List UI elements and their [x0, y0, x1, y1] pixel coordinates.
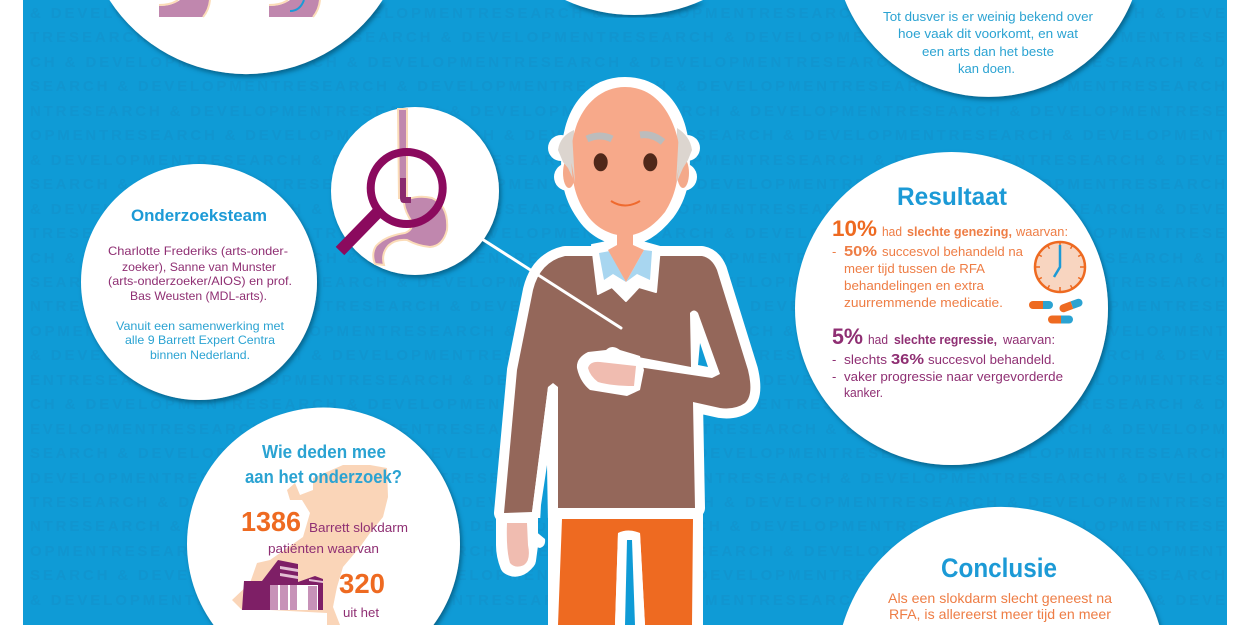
intro text: hoe vaak dit voorkomt, en wat [898, 26, 1078, 41]
pointer line from magnifier to chest [482, 239, 621, 328]
background text pattern: TRESEARCH & DEVELOPMENTRESEARCH & DEVELOPMENTRESEARCH & DEVELOPMENTRESEARCH & DEVELOPMENTRESE [30, 225, 1225, 242]
background text pattern: OPMENTRESEARCH & DEVELOPMENTRESEARCH & DEVELOPMENTRESEARCH & DEVELOPMENTRESEARCH & DEVELOPMENT [30, 127, 1225, 144]
background text pattern: NTRESEARCH & DEVELOPMENTRESEARCH & DEVELOPMENTRESEARCH & DEVELOPMENTRESEARCH & DEVELOPMENTRESE [30, 103, 1225, 120]
team members text: (arts-onderzoeker/AIOS) en prof. [108, 274, 292, 288]
hand on chest [577, 347, 644, 396]
stat: 1386 patients [241, 506, 408, 556]
background text pattern: OPMENTRESEARCH & DEVELOPMENTRESEARCH & DEVELOPMENTRESEARCH & DEVELOPMENTRESEARCH & DEVELOPMENT [30, 543, 1225, 560]
icon: oesophagus and stomach [373, 109, 447, 265]
intro text [883, 9, 1094, 76]
result: 10 percent poor healing: - [832, 244, 836, 259]
map of the Netherlands [232, 465, 388, 625]
conclusion text: Als een slokdarm slecht geneest na [888, 590, 1112, 606]
background text pattern: ENTRESEARCH & DEVELOPMENTRESEARCH & DEVELOPMENTRESEARCH & DEVELOPMENTRESEARCH & DEVELOPMENTRES [30, 372, 1225, 389]
heading: onderzoeksteam: Onderzoeksteam [131, 206, 267, 225]
result: 5 percent poor regression: succesvol behandeld. [928, 352, 1055, 367]
background text pattern: & DEVELOPMENTRESEARCH & DEVELOPMENTRESEARCH & DEVELOPMENTRESEARCH & DEVELOPMENTRESEARCH & DEVE [30, 5, 1225, 22]
result: 10 percent poor healing [832, 216, 1068, 310]
team members text: zoeker), Sanne van Munster [122, 260, 276, 274]
team members text: Bas Weusten (MDL-arts). [130, 289, 267, 303]
background text pattern: & DEVELOPMENTRESEARCH & DEVELOPMENTRESEARCH & DEVELOPMENTRESEARCH & DEVELOPMENTRESEARCH & DEVE [30, 592, 1225, 609]
arm gap between sleeve and torso [532, 383, 558, 512]
arm crease [638, 310, 720, 378]
result: 5 percent poor regression: waarvan: [1002, 332, 1055, 347]
background text pattern: CH & DEVELOPMENTRESEARCH & DEVELOPMENTRESEARCH & DEVELOPMENTRESEARCH & DEVELOPMENTRESEARCH & D [30, 250, 1225, 267]
result: 10 percent poor healing: 50% [844, 243, 877, 260]
panel: top-left stomach comparison [109, 0, 383, 74]
background text pattern: SEARCH & DEVELOPMENTRESEARCH & DEVELOPMENTRESEARCH & DEVELOPMENTRESEARCH & DEVELOPMENTRESEARCH [30, 567, 1225, 584]
ears [563, 158, 689, 188]
panel: top-centre circle [565, 0, 703, 15]
conclusion text: RFA, is allereerst meer tijd en meer [889, 606, 1111, 622]
panel: wie deden mee [187, 408, 460, 625]
stat: 1386 patients: Barrett slokdarm [309, 520, 408, 535]
icon: stomach right [269, 0, 320, 17]
result: 10 percent poor healing: 10% [832, 216, 877, 241]
background text pattern: EVELOPMENTRESEARCH & DEVELOPMENTRESEARCH & DEVELOPMENTRESEARCH & DEVELOPMENTRESEARCH & DEVELOPM [30, 421, 1225, 438]
icon: clock [1035, 242, 1085, 292]
heading: resultaat: Resultaat [897, 183, 1008, 211]
background text pattern: OPMENTRESEARCH & DEVELOPMENTRESEARCH & DEVELOPMENTRESEARCH & DEVELOPMENTRESEARCH & DEVELOPMENT [30, 323, 1225, 340]
collaboration text [116, 319, 285, 362]
intro text: kan doen. [958, 61, 1015, 76]
team members text: Charlotte Frederiks (arts-onder- [108, 244, 288, 258]
head [572, 87, 679, 236]
hair [558, 128, 692, 184]
hair over face [571, 130, 680, 184]
heading: wie deden mee: aan het onderzoek? [245, 467, 402, 487]
heading: wie deden mee [245, 442, 402, 487]
illustration: patient figure [504, 87, 750, 625]
result: 10 percent poor healing: meer tijd tussen de RFA [844, 261, 985, 276]
icon: pills [1029, 298, 1084, 324]
panel: onderzoeksteam [81, 164, 317, 400]
result: 5 percent poor regression [832, 324, 1063, 400]
result: 5 percent poor regression: vaker progressie naar vergevorderde [844, 369, 1063, 384]
panel: top-right introduction [845, 0, 1132, 97]
background text pattern: NTRESEARCH & DEVELOPMENTRESEARCH & DEVELOPMENTRESEARCH & DEVELOPMENTRESEARCH & DEVELOPMENTRESE [30, 518, 1225, 535]
eyebrows [587, 135, 663, 142]
stat: 320 patients: uit het [343, 605, 379, 620]
result: 10 percent poor healing: zuurremmende medicatie. [844, 295, 1003, 310]
stat: 1386 patients: 1386 [241, 506, 301, 537]
collaboration text: alle 9 Barrett Expert Centra [125, 333, 275, 347]
background text pattern: TRESEARCH & DEVELOPMENTRESEARCH & DEVELOPMENTRESEARCH & DEVELOPMENTRESEARCH & DEVELOPMENTRESE [30, 29, 1225, 46]
panel: conclusie [843, 507, 1159, 625]
collaboration text: Vanuit een samenwerking met [116, 319, 285, 333]
result: 5 percent poor regression: - [832, 352, 836, 367]
icon: stomach left [159, 0, 210, 17]
stat: 320 patients: 320 [339, 568, 385, 599]
heading: conclusie: Conclusie [941, 553, 1057, 583]
result: 10 percent poor healing: behandelingen en extra [844, 278, 985, 293]
background text pattern: DEVELOPMENTRESEARCH & DEVELOPMENTRESEARCH & DEVELOPMENTRESEARCH & DEVELOPMENTRESEARCH & DEVELOP [30, 470, 1225, 487]
icon: magnifying glass [340, 152, 443, 251]
background text pattern: SEARCH & DEVELOPMENTRESEARCH & DEVELOPMENTRESEARCH & DEVELOPMENTRESEARCH & DEVELOPMENTRESEARCH [30, 274, 1225, 291]
background text pattern: NTRESEARCH & DEVELOPMENTRESEARCH & DEVELOPMENTRESEARCH & DEVELOPMENTRESEARCH & DEVELOPMENTRESE [30, 298, 1225, 315]
background text pattern: SEARCH & DEVELOPMENTRESEARCH & DEVELOPMENTRESEARCH & DEVELOPMENTRESEARCH & DEVELOPMENTRESEARCH [30, 78, 1225, 95]
background text pattern: CH & DEVELOPMENTRESEARCH & DEVELOPMENTRESEARCH & DEVELOPMENTRESEARCH & DEVELOPMENTRESEARCH & D [30, 54, 1225, 71]
background text pattern: SEARCH & DEVELOPMENTRESEARCH & DEVELOPMENTRESEARCH & DEVELOPMENTRESEARCH & DEVELOPMENTRESEARCH [30, 445, 1225, 462]
result: 10 percent poor healing: had [882, 224, 902, 239]
stat: 320 patients [339, 568, 385, 620]
sweater [504, 256, 750, 513]
stat: 1386 patients: patiënten waarvan [268, 541, 379, 556]
team members text [108, 244, 292, 303]
collaboration text: binnen Nederland. [150, 348, 250, 362]
result: 5 percent poor regression: had [868, 332, 888, 347]
eyes [594, 153, 657, 171]
trousers [558, 519, 693, 625]
result: 10 percent poor healing: slechte genezing, [907, 224, 1012, 239]
panel: magnifier on stomach [331, 107, 499, 275]
background text pattern: & DEVELOPMENTRESEARCH & DEVELOPMENTRESEARCH & DEVELOPMENTRESEARCH & DEVELOPMENTRESEARCH & DEVE [30, 152, 1225, 169]
shirt collar [592, 230, 660, 301]
result: 5 percent poor regression: 5% [832, 324, 863, 349]
result: 5 percent poor regression: - [832, 369, 836, 384]
hanging hand [507, 523, 545, 567]
icon: hospital building [242, 560, 323, 610]
result: 5 percent poor regression: kanker. [844, 385, 883, 400]
blue gap beside sleeve [540, 465, 548, 523]
mouth [611, 201, 640, 206]
result: 5 percent poor regression: slechts [844, 352, 888, 367]
background text pattern: SEARCH & DEVELOPMENTRESEARCH & DEVELOPMENTRESEARCH & DEVELOPMENTRESEARCH & DEVELOPMENTRESEARCH [30, 176, 1225, 193]
background text pattern: CH & DEVELOPMENTRESEARCH & DEVELOPMENTRESEARCH & DEVELOPMENTRESEARCH & DEVELOPMENTRESEARCH & D [30, 396, 1225, 413]
background text pattern: & DEVELOPMENTRESEARCH & DEVELOPMENTRESEARCH & DEVELOPMENTRESEARCH & DEVELOPMENTRESEARCH & DEVE [30, 347, 1225, 364]
result: 10 percent poor healing: succesvol behandeld na [882, 244, 1024, 259]
result: 10 percent poor healing: waarvan: [1015, 224, 1068, 239]
conclusion text [888, 590, 1112, 622]
background text pattern: & DEVELOPMENTRESEARCH & DEVELOPMENTRESEARCH & DEVELOPMENTRESEARCH & DEVELOPMENTRESEARCH & DEVE [30, 201, 1225, 218]
intro text: Tot dusver is er weinig bekend over [883, 9, 1094, 24]
result: 5 percent poor regression: slechte regressie, [894, 332, 997, 347]
figure white outline [504, 87, 750, 625]
background text pattern: TRESEARCH & DEVELOPMENTRESEARCH & DEVELOPMENTRESEARCH & DEVELOPMENTRESEARCH & DEVELOPMENTRESE [30, 494, 1225, 511]
panel: resultaat [795, 152, 1108, 465]
intro text: een arts dan het beste [922, 44, 1054, 59]
gap between legs [615, 530, 645, 625]
heading: wie deden mee: Wie deden mee [262, 442, 386, 462]
result: 5 percent poor regression: 36% [891, 351, 924, 368]
